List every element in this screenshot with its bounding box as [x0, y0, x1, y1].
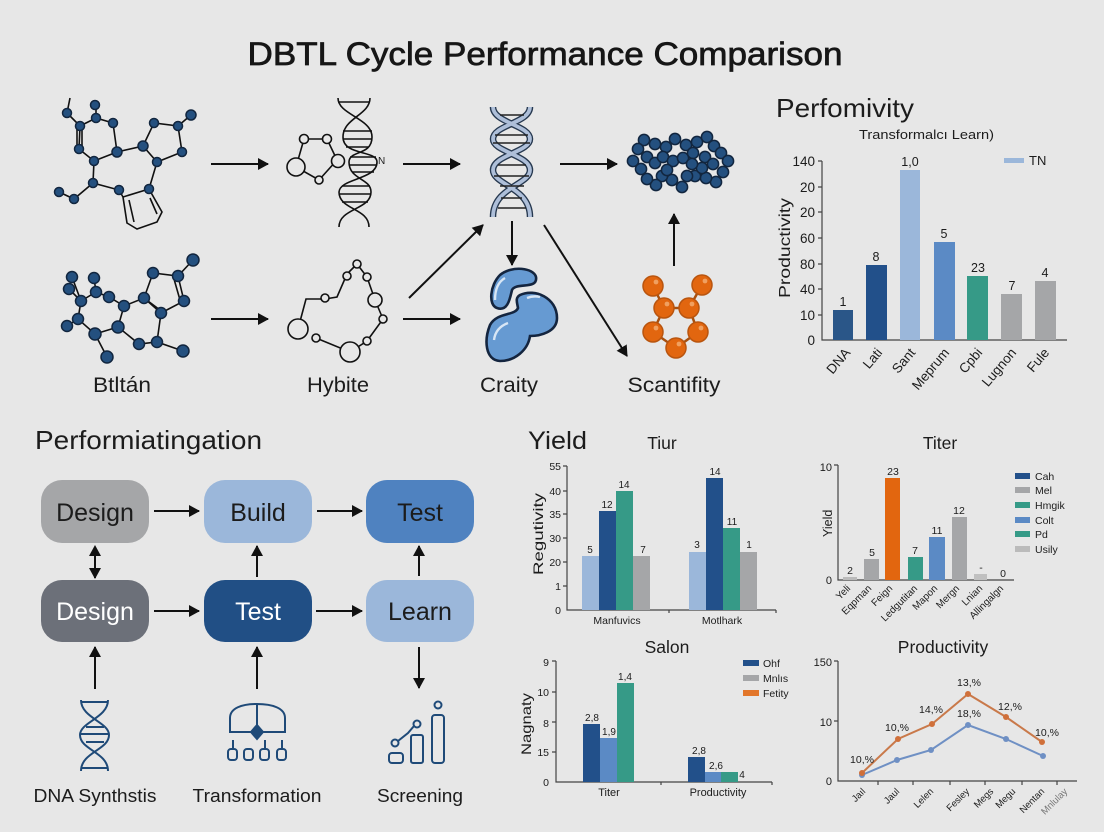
chart: Productivity line: Megs	[972, 786, 996, 811]
chart: Productivity line	[814, 637, 1077, 817]
chart: Tiur: Manfuvics	[593, 615, 641, 627]
chart: Productivity line: 12,%	[998, 701, 1022, 713]
flow: boxes: Test	[397, 499, 443, 527]
legend: Titer: Hmgik	[1035, 500, 1066, 512]
chart: Tiur: 5	[587, 545, 593, 556]
chart: productivity bars: 20	[800, 180, 815, 195]
flow: boxes: Design	[56, 499, 134, 527]
chart: Tiur: 11	[727, 517, 738, 528]
chart: Productivity line: 150	[814, 657, 832, 669]
chart: productivity bars	[777, 154, 1067, 393]
chart: Productivity line: 10,%	[1035, 727, 1059, 739]
chart: Titer bars: Feign	[870, 583, 895, 609]
chart: Titer bars: Yeli	[834, 583, 853, 602]
legend: Titer: Cah	[1035, 471, 1054, 483]
icon: orange molecule	[643, 275, 712, 358]
chart: Titer bars: Yield	[821, 510, 835, 537]
icon: dense blue cluster	[627, 131, 734, 193]
chart: Tiur: 20	[549, 557, 561, 569]
chart: productivity bars: Lugnon	[979, 345, 1019, 389]
arrows: top pathway	[211, 164, 674, 356]
chart: Tiur	[530, 433, 776, 627]
labels: pathway: Craity	[480, 374, 539, 397]
icon: ring chain	[288, 260, 387, 362]
icon: screening	[389, 702, 444, 763]
chart: Titer bars: -	[979, 562, 983, 574]
icon: molecule top left	[54, 98, 196, 229]
chart: Salon: 1,4	[618, 672, 632, 683]
chart: productivity bars: Meprum	[909, 345, 952, 393]
chart: Productivity line: Nentan	[1018, 786, 1047, 816]
chart: Productivity line: 10,%	[885, 722, 909, 734]
chart: Titer bars: Ledgutitan	[879, 583, 920, 624]
chart: Tiur: Motlhark	[702, 615, 743, 627]
chart: productivity bars: 7	[1009, 279, 1016, 293]
legend: Titer: Pd	[1035, 529, 1048, 541]
chart: productivity bars: 80	[800, 257, 815, 272]
chart: Titer bars: 5	[869, 547, 875, 559]
chart: Productivity line: Mnlulay	[1039, 786, 1070, 817]
chart: Tiur: 1	[746, 540, 752, 551]
chart: Titer bars: Titer	[923, 433, 957, 453]
chart: Salon: 8	[543, 718, 549, 730]
icon: DNA synthesis	[80, 700, 109, 771]
chart: Productivity line: 10	[820, 717, 832, 729]
chart: productivity bars: 140	[792, 154, 815, 169]
flow: boxes: Learn	[388, 598, 452, 626]
chart: Titer bars: 10	[820, 462, 832, 474]
chart: productivity bars: Sant	[889, 345, 918, 376]
legend: Salon: Fetity	[763, 688, 789, 700]
title: DBTL Cycle Performance Comparison	[248, 36, 843, 72]
legend: Titer: Colt	[1035, 515, 1054, 527]
chart: Tiur: 30	[549, 533, 561, 545]
chart: Productivity line: Lelen	[912, 786, 936, 811]
flow: boxes	[41, 480, 474, 642]
chart: Productivity line: 18,%	[957, 708, 981, 720]
chart: Titer bars: Lnian	[960, 583, 985, 608]
legend: Titer: Mel	[1035, 485, 1052, 497]
chart: Salon: 1,9	[602, 727, 616, 738]
chart: productivity bars: Fule	[1024, 345, 1052, 375]
chart: Productivity line: Jaıl	[850, 786, 868, 805]
chart: Salon: 0	[543, 777, 549, 789]
legend: Titer: Usily	[1035, 544, 1058, 556]
chart: Salon: Titer	[598, 787, 620, 799]
chart: Titer bars: 7	[912, 545, 918, 557]
chart: Productivity line: Jaul	[882, 786, 902, 806]
chart: productivity bars: 8	[873, 250, 880, 264]
icon: transformation	[228, 704, 286, 760]
chart: Titer bars: Eqpman	[840, 583, 874, 617]
legend: Titer	[1015, 471, 1066, 556]
chart: Productivity line: 13,%	[957, 677, 981, 689]
chart: productivity bars: DNA	[823, 345, 853, 377]
chart: Titer bars: 2	[847, 565, 853, 577]
labels: flow icons: Screening	[377, 785, 463, 806]
labels: flow icons: DNA Synthstis	[34, 785, 156, 806]
chart: Salon: 15	[537, 747, 549, 759]
chart: productivity bars: 40	[800, 282, 815, 297]
chart: Salon: 4	[739, 770, 745, 781]
icon: blue DNA helix	[493, 107, 530, 217]
icon: molecule bottom left	[62, 254, 199, 363]
labels: pathway: Hybite	[307, 374, 369, 397]
chart: Productivity line: Megu	[994, 786, 1018, 811]
chart: Tiur: 55	[549, 461, 561, 473]
flow: boxes: Design	[56, 598, 134, 626]
heading: Perfomivity: Perfomivity	[776, 93, 914, 123]
icon: ring and DNA outline	[287, 98, 385, 227]
chart: Salon: 9	[543, 657, 549, 669]
chart: Tiur: 7	[640, 545, 646, 556]
chart: Salon: Salon	[645, 637, 689, 657]
chart: Salon: Nagnaty	[518, 693, 534, 755]
flow: boxes: Build	[230, 499, 286, 527]
chart: Productivity line: 10,%	[850, 754, 874, 766]
chart: Tiur: 14	[709, 467, 721, 478]
chart: Salon: 10	[537, 687, 549, 699]
chart: productivity bars: 10	[800, 308, 815, 323]
chart: Tiur: 40	[549, 486, 561, 498]
icon: ring and DNA outline: N	[378, 156, 385, 167]
subtitle: Transformalcı Learn)	[859, 127, 994, 142]
legend: Salon: Ohf	[763, 658, 780, 670]
heading: Yield: Yield	[528, 427, 587, 455]
chart: Titer bars	[820, 433, 1014, 624]
chart: Titer bars: 23	[887, 466, 899, 478]
chart: productivity bars: 5	[941, 227, 948, 241]
chart: Titer bars: Mergn	[934, 583, 962, 611]
chart: productivity bars: Productivity	[777, 198, 794, 298]
icon: protein blob	[487, 269, 557, 361]
legend: TN	[1004, 153, 1046, 168]
chart: Tiur: 0	[555, 605, 561, 617]
chart: productivity bars: 1	[840, 295, 847, 309]
chart: Tiur: 3	[694, 540, 700, 551]
chart: Tiur: Tiur	[647, 433, 677, 453]
chart: Salon: 2,8	[585, 713, 599, 724]
chart: productivity bars: 1,0	[901, 155, 919, 169]
legend: TN: TN	[1029, 153, 1046, 168]
chart: Tiur: 1	[555, 581, 561, 593]
chart: Salon: 2,8	[692, 746, 706, 757]
flow: boxes: Test	[235, 598, 281, 626]
labels: flow icons	[34, 785, 463, 806]
chart: Tiur: 14	[618, 480, 630, 491]
labels: flow icons: Transformation	[192, 785, 322, 806]
chart: productivity bars: 60	[800, 231, 815, 246]
chart: Titer bars: 11	[932, 525, 943, 537]
legend: Salon: Mnlıs	[763, 673, 788, 685]
chart: productivity bars: Lati	[860, 345, 885, 372]
chart: Productivity line: 14,%	[919, 704, 943, 716]
chart: Titer bars: 0	[826, 575, 832, 587]
chart: Titer bars: 12	[953, 505, 965, 517]
legend: Salon	[743, 658, 789, 700]
chart: Productivity line: 0	[826, 776, 832, 788]
chart: productivity bars: 0	[807, 333, 815, 348]
labels: pathway: Btltán	[93, 374, 151, 397]
chart: productivity bars: 20	[800, 205, 815, 220]
chart: Salon: 2,6	[709, 761, 723, 772]
chart: productivity bars: 4	[1042, 266, 1049, 280]
chart: Productivity line: Productivity	[898, 637, 988, 657]
chart: Productivity line: Fesley	[945, 786, 972, 814]
chart: productivity bars: Cpbi	[956, 345, 985, 376]
chart: Salon	[518, 637, 772, 799]
chart: Titer bars: Allingalgn	[968, 583, 1006, 622]
chart: productivity bars: 23	[971, 261, 985, 275]
labels: pathway: Scantifity	[628, 374, 721, 397]
chart: Tiur: 35	[549, 509, 561, 521]
chart: Tiur: 12	[601, 500, 613, 511]
labels: pathway	[93, 374, 721, 397]
flow: arrows	[95, 511, 419, 689]
chart: Tiur: Regutivity	[530, 493, 546, 575]
heading: Performiatingation: Performiatingation	[35, 425, 262, 455]
chart: Salon: Productivity	[690, 787, 747, 799]
chart: Titer bars: Mapon	[911, 583, 940, 613]
chart: Titer bars: 0	[1000, 568, 1006, 580]
